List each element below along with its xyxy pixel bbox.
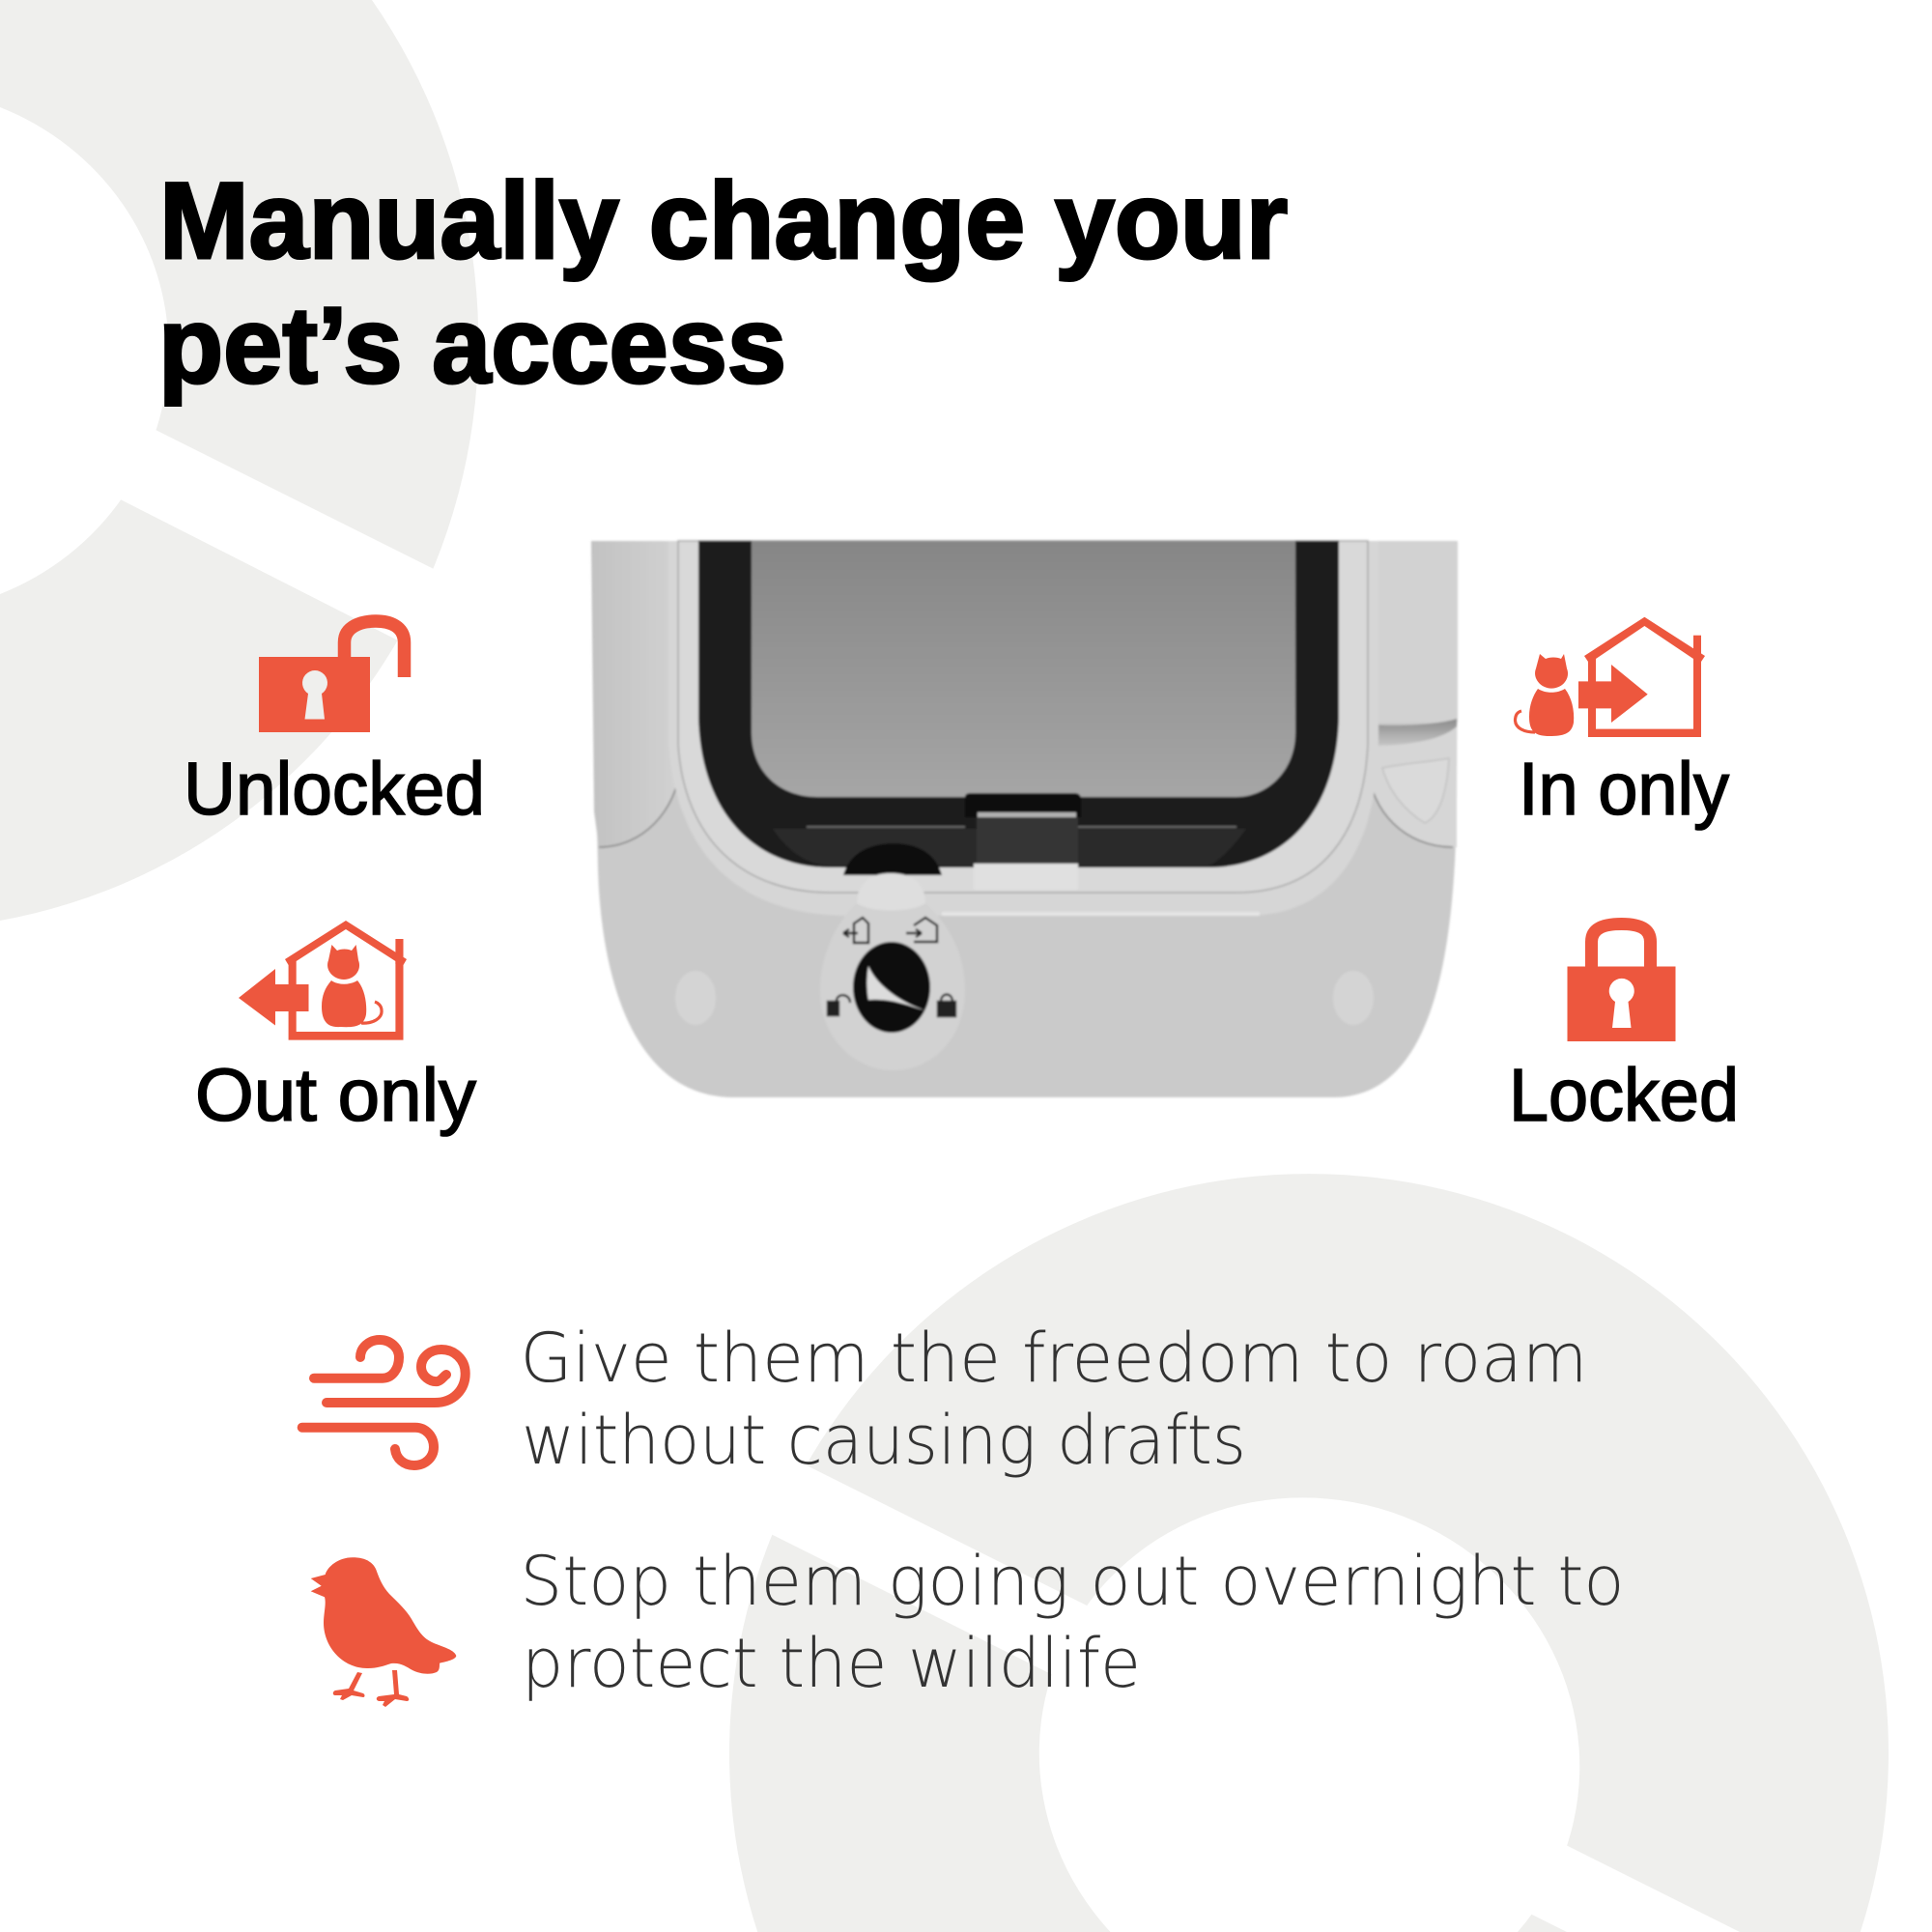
flap body — [591, 541, 1458, 1097]
title — [158, 160, 1288, 406]
product photo: cat flap — [591, 541, 1458, 1097]
text: protect wildlife: protect the wildlife — [522, 1624, 1141, 1703]
label: Out only: Out only — [195, 1054, 476, 1137]
curved seam lines — [599, 765, 1453, 847]
knob — [853, 942, 930, 1033]
text: freedom to roam: Give them the freedom to roam — [520, 1319, 1588, 1398]
icon: in only house with cat — [1515, 617, 1705, 737]
right recess grip — [1382, 758, 1449, 823]
background: top-left ring shape — [0, 0, 628, 921]
dial icons — [828, 918, 955, 1016]
icon: locked padlock — [1567, 923, 1675, 1041]
label: Locked: Locked — [1509, 1054, 1739, 1137]
frame lower bevel — [773, 829, 1246, 866]
text: freedom to roam: without causing drafts — [522, 1401, 1246, 1480]
text: protect wildlife — [520, 1542, 1625, 1703]
black frame — [698, 541, 1339, 867]
title: pet’s access — [158, 285, 786, 406]
bumps — [675, 971, 716, 1025]
latch tab — [965, 793, 1081, 866]
right pillar shadow — [1371, 719, 1457, 746]
text: freedom to roam — [520, 1319, 1588, 1480]
label: Unlocked: Unlocked — [184, 748, 485, 831]
frame inner lines — [807, 826, 1236, 828]
dial stem highlight — [857, 873, 925, 910]
left pillar — [591, 541, 681, 847]
surround — [678, 541, 1368, 893]
right pillar upper — [1371, 541, 1458, 723]
knob pointer — [867, 966, 925, 1010]
background: bottom-right ring shape — [729, 1174, 1889, 1932]
dial rotor — [843, 843, 942, 875]
title: Manually change your — [159, 160, 1288, 281]
label: In only: In only — [1519, 748, 1729, 831]
right pillar lower recess — [1368, 726, 1457, 847]
icon: bird — [311, 1557, 456, 1707]
icon: unlocked padlock — [259, 621, 404, 732]
text: protect wildlife: Stop them going out overnight to — [520, 1542, 1625, 1621]
dial plate — [820, 873, 965, 1070]
icon: wind — [302, 1340, 466, 1465]
light strip — [974, 864, 1078, 890]
glass — [752, 541, 1295, 797]
highlight band — [668, 541, 1378, 916]
icon: out only house with cat — [239, 921, 407, 1040]
